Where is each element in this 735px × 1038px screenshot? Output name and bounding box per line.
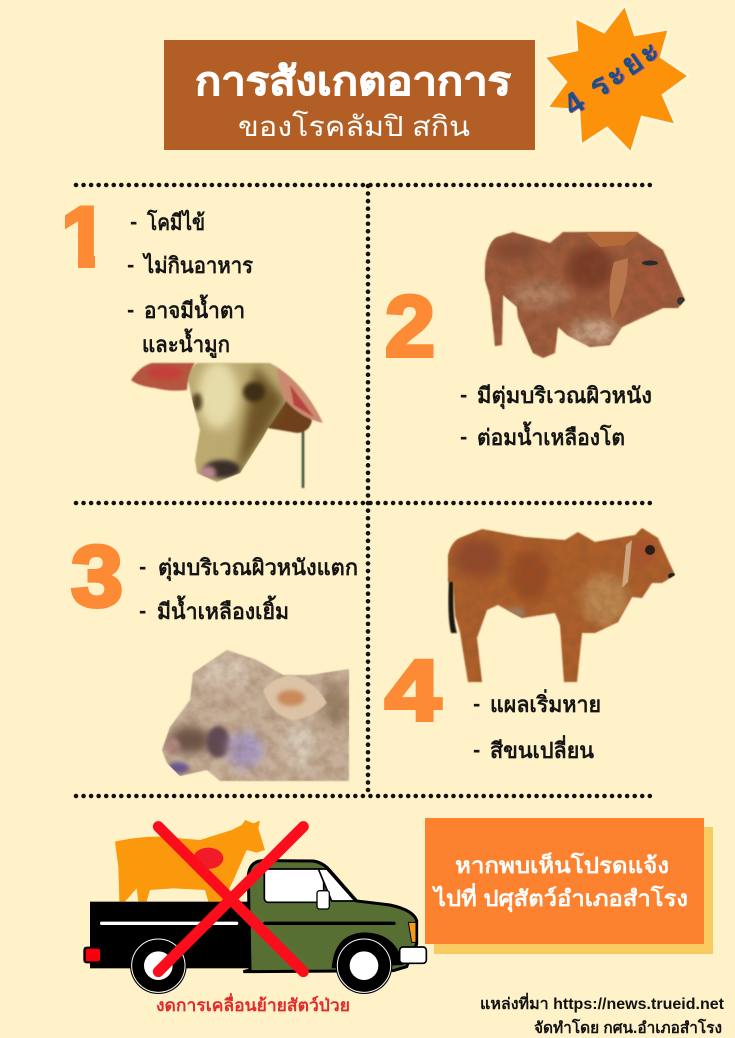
stage 3 symptoms: - [139,598,146,623]
stage 4 symptoms: - [473,737,480,762]
stage 1 symptoms: - [130,209,137,234]
stage 2 symptoms [460,382,652,450]
stage 4 symptoms [473,688,601,763]
icon: orange cow [115,820,265,902]
icon: pickup truck [83,861,426,994]
stage 4 [385,525,677,763]
stage 3 symptoms: - [139,554,146,579]
source credits: จัดทำโดย กศน.อำเภอสำโรง [534,1018,722,1037]
stage 1 symptoms [127,209,253,359]
title main line: การสังเกตอาการ [195,60,512,104]
stage 1 symptoms: ไม่กินอาหาร [142,252,253,278]
stage 1 [60,190,323,488]
stage 3 symptoms: ตุ่มบริเวณผิวหนังแตก [158,555,358,582]
number 3: 3 [71,529,123,625]
stage 3 symptoms [139,554,358,624]
stage 1 symptoms: โคมีไข้ [146,209,205,235]
stage 2 symptoms: - [460,424,467,449]
number 4: 4 [385,643,441,739]
notice box [425,818,713,954]
stage 3 [71,529,358,783]
stage 4 symptoms: แผลเริ่มหาย [490,688,601,717]
notice box: ไปที่ ปศุสัตว์อำเภอสำโรง [432,882,688,913]
starburst badge: 4 stages: 4 ระยะ [558,32,667,123]
notice box: หากพบเห็นโปรดแจ้ง [455,851,669,878]
source credits [480,992,724,1037]
starburst badge: 4 stages [544,5,689,153]
stage 4 symptoms: สีขนเปลี่ยน [490,734,594,763]
cow head photo [131,361,323,488]
truck with crossed-out cow [83,820,426,994]
number 1: 1 [60,190,108,286]
stage 1 symptoms: - [127,297,134,322]
stage 2 symptoms: ต่อมน้ำเหลืองโต [477,421,625,450]
stage 3 symptoms: มีน้ำเหลืองเยิ้ม [157,595,289,624]
stage 1 symptoms: อาจมีน้ำตา [144,294,245,323]
starburst badge: 4 stages: 4 ระยะ [557,32,665,123]
number 2: 2 [385,279,435,375]
stage 1 symptoms: และน้ำมูก [142,328,230,359]
stage 2 symptoms: - [460,382,467,407]
stage 2 [385,228,690,450]
stage 2 symptoms: มีตุ่มบริเวณผิวหนัง [477,383,652,410]
cow recovering photo [445,525,677,685]
title banner [164,40,535,150]
cow with nodules photo [480,228,690,363]
stage 1 symptoms: - [127,252,134,277]
source credits: แหล่งที่มา https://news.trueid.net [480,992,724,1013]
caption: no moving sick animals: งดการเคลื่อนย้ายสัตว์ป่วย [156,993,350,1015]
stage 4 symptoms: - [473,691,480,716]
icon: red cross [158,827,303,972]
title sub line: ของโรคลัมปิ สกิน [238,110,470,142]
cow with ruptured skin photo [160,648,350,783]
